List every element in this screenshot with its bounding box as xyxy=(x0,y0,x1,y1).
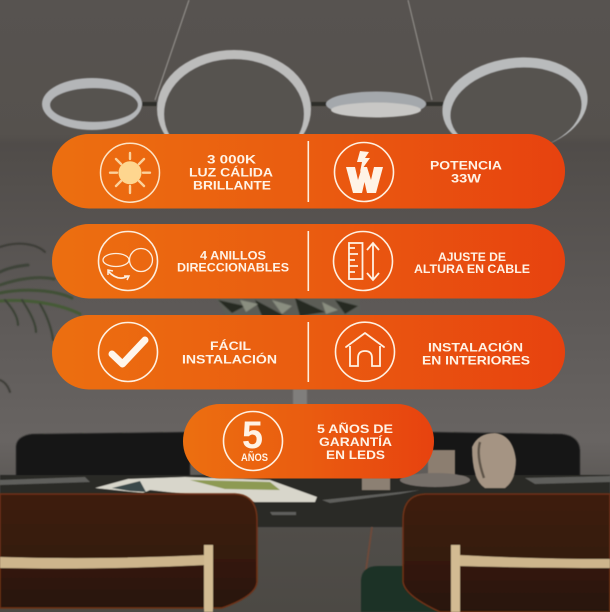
text: fácil instalación: INSTALACIÓN xyxy=(182,352,277,367)
photo: left chair xyxy=(0,494,257,612)
pill background row 4 xyxy=(183,404,434,478)
panel: potencia xyxy=(308,141,502,202)
text: 3 000K luz cálida brillante: BRILLANTE xyxy=(193,178,271,192)
icon: watt bolt xyxy=(334,142,394,202)
text: 3 000K luz cálida brillante: LUZ CÁLIDA xyxy=(189,165,273,180)
icon: sun xyxy=(100,143,160,202)
icon: ruler and arrow xyxy=(334,232,392,290)
text: instalación en interiores: EN INTERIORES xyxy=(422,353,530,367)
panel: fácil instalación xyxy=(52,315,565,390)
text: 4 anillos direccionables: 4 ANILLOS xyxy=(200,248,266,262)
pill background row 2 xyxy=(52,224,565,298)
divider row 2 xyxy=(308,231,309,291)
text: instalación en interiores xyxy=(422,340,530,367)
photo: plant on left xyxy=(0,244,80,392)
text: 5 años de garantía en leds xyxy=(317,421,393,462)
text: ajuste de altura en cable: AJUSTE DE xyxy=(438,250,506,264)
text: 4 anillos direccionables: DIRECCIONABLES xyxy=(177,260,289,274)
text: potencia 33W: POTENCIA xyxy=(430,159,502,173)
text: ajuste de altura en cable: ALTURA EN CABLE xyxy=(414,262,530,276)
icon: 5 años badge xyxy=(224,412,282,470)
text: fácil instalación xyxy=(182,338,277,367)
icon: 5 años badge: AÑOS xyxy=(241,451,268,464)
photo: ceiling lamp with rings xyxy=(42,0,594,169)
text: potencia 33W: 33W xyxy=(451,172,482,186)
panel: ajuste de altura xyxy=(308,231,530,291)
photo: table with magazine and crockery xyxy=(0,433,610,527)
text: fácil instalación: FÁCIL xyxy=(210,338,251,353)
pill background row 3 xyxy=(52,315,565,390)
text: 4 anillos direccionables xyxy=(177,248,289,274)
photo: central plant and vase xyxy=(216,298,360,405)
panel: luz cálida xyxy=(52,134,565,208)
text: instalación en interiores: INSTALACIÓN xyxy=(428,340,523,355)
divider row 1 xyxy=(308,141,309,202)
divider row 3 xyxy=(308,322,309,382)
text: 5 años de garantía en leds: EN LEDS xyxy=(326,448,385,462)
photo: bench behind the table xyxy=(16,432,580,478)
icon: check mark xyxy=(98,322,158,382)
pill background row 1 xyxy=(52,134,565,208)
text: potencia 33W xyxy=(430,159,502,186)
text: 3 000K luz cálida brillante xyxy=(189,153,273,192)
panel: garantía 5 años xyxy=(183,404,434,478)
text: ajuste de altura en cable xyxy=(414,250,530,276)
text: 5 años de garantía en leds: GARANTÍA xyxy=(319,434,392,449)
panel: instalación en interiores xyxy=(308,322,530,382)
text: 3 000K luz cálida brillante: 3 000K xyxy=(207,153,256,167)
photo: table leg and green stool xyxy=(361,527,450,612)
icon: 5 años badge: 5 xyxy=(242,414,263,457)
panel: anillos direccionables xyxy=(52,224,565,298)
icon: rotating rings xyxy=(98,232,158,290)
icon: house xyxy=(336,322,394,381)
text: 5 años de garantía en leds: 5 AÑOS DE xyxy=(317,421,393,436)
photo: right chair xyxy=(403,494,610,612)
